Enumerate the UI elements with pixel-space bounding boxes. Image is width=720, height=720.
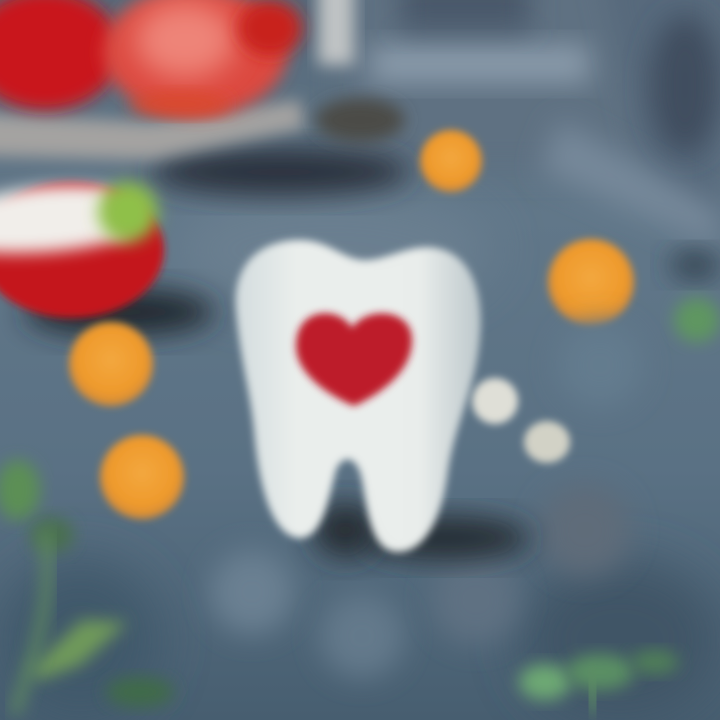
faint circle: bottom right [432, 556, 520, 644]
shadow under the tooth [313, 502, 530, 560]
heart [296, 313, 412, 406]
small pill: lower [524, 421, 570, 463]
orange ball: left upper [69, 322, 153, 406]
orange ball: top [420, 130, 482, 192]
leaf: right edge [674, 298, 720, 342]
faint circle: right upper [558, 323, 642, 407]
plate [0, 0, 405, 160]
plant: bottom right [519, 650, 679, 712]
faint circle: lower right [539, 484, 631, 576]
shadow under the apple [25, 288, 215, 336]
plant: bottom left [0, 460, 174, 714]
shadow below the plate [150, 148, 410, 196]
tooth [236, 240, 481, 552]
red fruit on the plate [0, 0, 302, 116]
orange ball: left lower [100, 435, 184, 519]
apple slice [0, 182, 164, 318]
cloth in the top right [340, 0, 720, 279]
faint circle: bottom left [210, 550, 294, 634]
orange ball: right [548, 239, 634, 325]
faint circle: bottom centre [320, 594, 404, 678]
small pill: upper [472, 378, 518, 424]
